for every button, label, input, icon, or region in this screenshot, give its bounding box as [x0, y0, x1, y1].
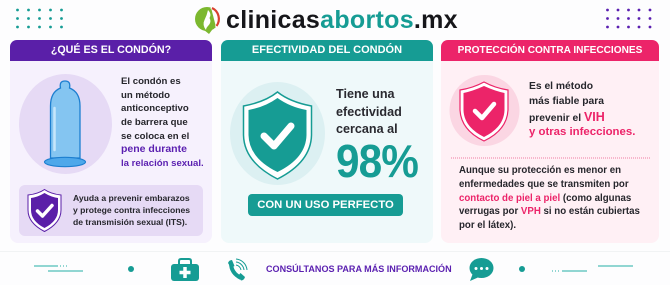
panel: protección — [441, 40, 659, 243]
text: definition: de barrera que — [121, 117, 188, 128]
callout: prevention — [19, 185, 203, 236]
stat: 98%: 98% — [336, 135, 418, 187]
text: skin contact caveat: enfermedades que se transmiten por — [459, 179, 629, 190]
panel heading — [221, 40, 433, 61]
panel background — [441, 61, 659, 243]
text: most reliable: prevenir el VIH — [529, 110, 605, 124]
callout text — [73, 193, 190, 227]
text: definition: la relación sexual. — [121, 158, 204, 169]
panel background — [221, 61, 433, 243]
text: most reliable: más fiable para — [529, 96, 604, 107]
badge: perfect use — [248, 194, 403, 216]
text: effectiveness: efectividad — [336, 105, 402, 119]
text: most reliable: Es el método — [529, 81, 593, 92]
decorative dots: teal — [16, 8, 63, 28]
text: most reliable: y otras infecciones. — [529, 126, 635, 138]
panel heading: PROTECCIÓN CONTRA INFECCIONES — [458, 45, 642, 56]
decorative dots: purple — [606, 8, 652, 28]
text: effectiveness: cercana al — [336, 122, 398, 136]
text: most reliable — [529, 81, 635, 138]
callout text: Ayuda a prevenir embarazos — [73, 193, 190, 203]
icon: medical kit — [171, 258, 199, 281]
icon: condom — [19, 74, 112, 174]
panel: qué es el condón — [10, 40, 212, 243]
text: definition — [121, 76, 204, 169]
panel heading: ¿QUÉ ES EL CONDÓN? — [51, 44, 171, 56]
panel: efectividad — [221, 40, 433, 243]
text: skin contact caveat: verrugas por VPH si no están cubiertas — [459, 206, 640, 217]
footer decoration left — [34, 266, 134, 272]
callout text: de transmisión sexual (ITS). — [73, 217, 187, 227]
text: skin contact caveat — [459, 165, 640, 231]
icon: teal shield — [230, 82, 325, 185]
text: definition: anticonceptivo — [121, 103, 189, 114]
footer — [0, 251, 670, 285]
panel heading: EFECTIVIDAD DEL CONDÓN — [252, 44, 402, 56]
text: definition: pene durante — [121, 143, 187, 155]
text: skin contact caveat: por el látex). — [459, 220, 516, 231]
icon: purple shield — [28, 189, 62, 232]
footer call to action: CONSÚLTANOS PARA MÁS INFORMACIÓN — [266, 264, 452, 274]
text: definition: El condón es — [121, 76, 181, 87]
icon: phone — [228, 258, 248, 280]
text: definition: un método — [121, 90, 170, 101]
logo wordmark: clinicasabortos.mx — [226, 6, 458, 34]
footer decoration right — [519, 266, 633, 272]
icon: chat bubble — [470, 258, 494, 281]
panel heading — [10, 40, 212, 61]
icon: pink shield — [450, 75, 520, 146]
badge: perfect use: CON UN USO PERFECTO — [257, 199, 394, 211]
text: effectiveness: Tiene una — [336, 87, 395, 101]
divider — [451, 158, 650, 159]
panel heading — [441, 40, 659, 61]
text: effectiveness — [336, 87, 402, 136]
text: definition: se coloca en el — [121, 131, 189, 142]
text: skin contact caveat: contacto de piel a piel (como algunas — [459, 193, 631, 204]
panel background — [10, 61, 212, 243]
text: skin contact caveat: Aunque su protección es menor en — [459, 165, 621, 176]
callout text: y protege contra infecciones — [73, 205, 190, 215]
logo icon — [195, 7, 220, 34]
